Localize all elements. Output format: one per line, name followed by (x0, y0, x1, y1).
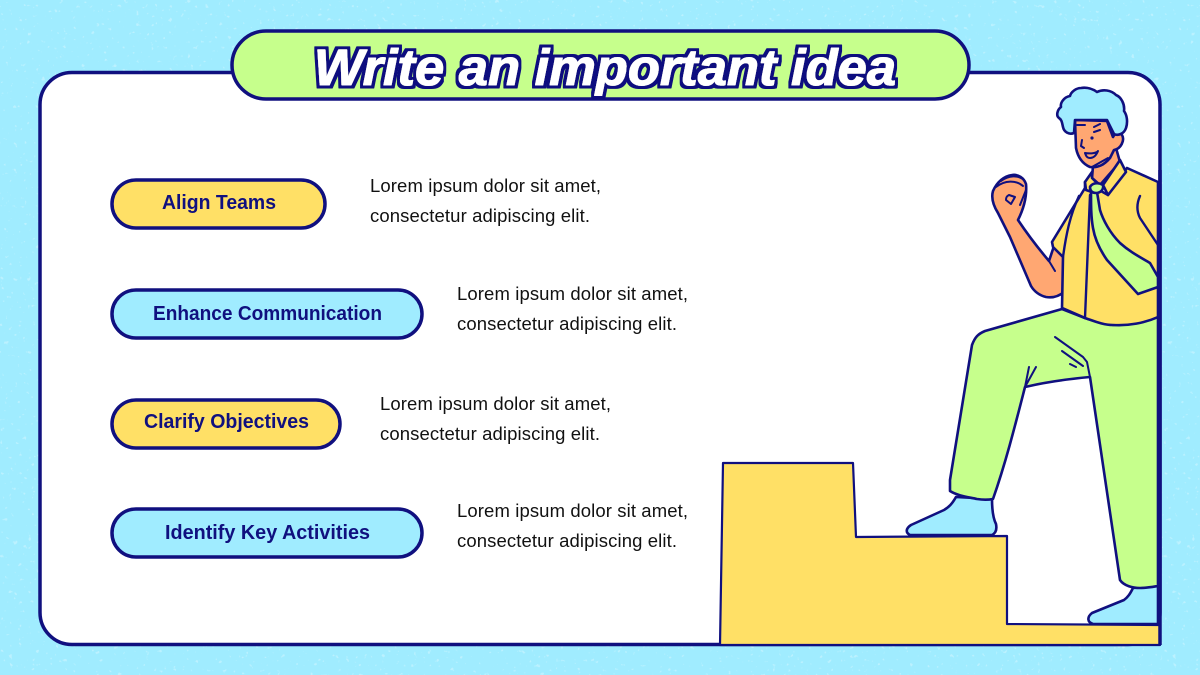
head (1075, 120, 1123, 167)
item: Identify Key Activities (112, 500, 688, 557)
arm and fist (992, 175, 1072, 297)
description: consectetur adipiscing elit. (457, 530, 677, 551)
trouser creases (1025, 337, 1090, 387)
shirt seams (1063, 195, 1158, 318)
label: Identify Key Activities (165, 522, 370, 544)
card right edge overlay (1158, 170, 1162, 645)
tie (1091, 192, 1158, 294)
description: consectetur adipiscing elit. (380, 423, 600, 444)
shirt (1052, 168, 1158, 325)
title: Write an important idea (314, 39, 896, 96)
illustration: man climbing stairs (907, 88, 1160, 645)
label pill (112, 290, 422, 338)
collar (1085, 160, 1126, 195)
panel: main white card (40, 72, 1160, 644)
fist detail (996, 176, 1055, 271)
item: Align Teams (112, 175, 601, 228)
hair (1057, 88, 1127, 135)
illustration: stairs (720, 463, 1160, 645)
item: Enhance Communication (112, 283, 688, 338)
description: Lorem ipsum dolor sit amet, (457, 500, 688, 521)
description: Lorem ipsum dolor sit amet, (380, 393, 611, 414)
trousers (950, 309, 1158, 588)
label pill (112, 180, 325, 228)
label: Align Teams (162, 192, 276, 214)
description: Lorem ipsum dolor sit amet, (457, 283, 688, 304)
front foot (907, 497, 996, 535)
label pill (112, 400, 340, 448)
title banner (232, 31, 969, 99)
description: consectetur adipiscing elit. (370, 205, 590, 226)
tie knot (1090, 183, 1103, 193)
face features (1077, 124, 1108, 167)
description: Lorem ipsum dolor sit amet, (370, 175, 601, 196)
banner pill (232, 31, 969, 99)
neck (1092, 148, 1120, 185)
label pill (112, 509, 422, 557)
description: consectetur adipiscing elit. (457, 313, 677, 334)
label: Enhance Communication (153, 303, 382, 325)
item: Clarify Objectives (112, 393, 611, 448)
label: Clarify Objectives (144, 411, 309, 433)
back foot (1088, 586, 1158, 624)
eye (1090, 136, 1094, 140)
